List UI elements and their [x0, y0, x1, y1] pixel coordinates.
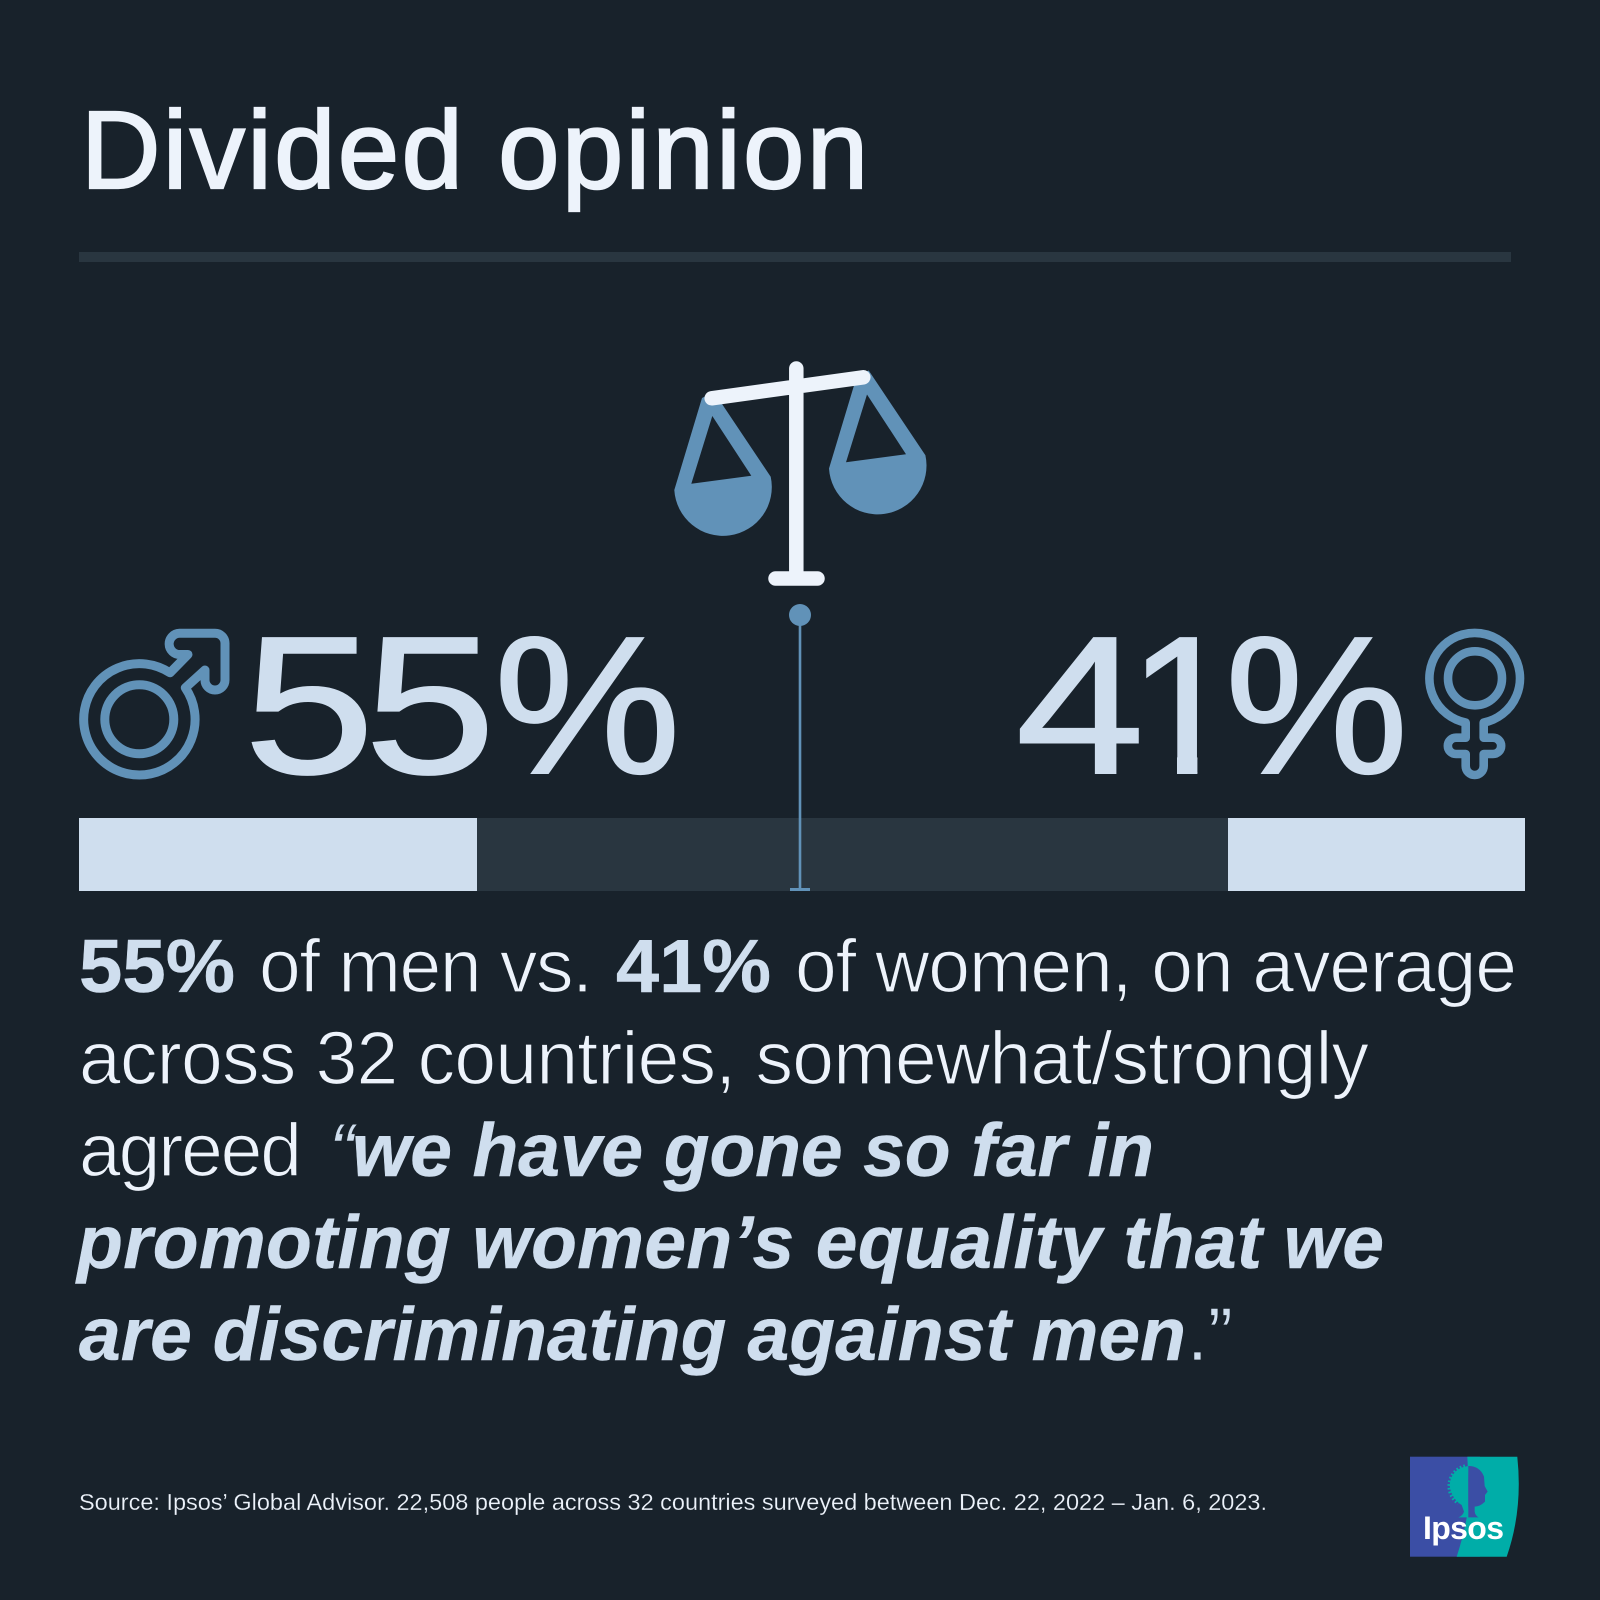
men percentage [244, 596, 681, 815]
men percentage: 5 [244, 596, 375, 815]
body statement: promoting women’s equality that we [75, 1200, 1384, 1284]
women percentage: 1 [1128, 596, 1239, 815]
women percentage: % [1225, 596, 1408, 815]
body statement: of men vs. [259, 924, 593, 1008]
body statement: “ [329, 1108, 358, 1192]
body statement: 55% [79, 924, 235, 1008]
source note: Source: Ipsos’ Global Advisor. 22,508 people across 32 countries surveyed between Dec. 22, 2022 – Jan. 6, 2023. [79, 1489, 1267, 1515]
men percentage: % [494, 596, 681, 815]
icon: female symbol [1429, 633, 1520, 775]
icon: balance scale [674, 368, 927, 578]
body statement: agreed [79, 1108, 302, 1192]
title: Divided opinion [81, 89, 868, 212]
logo: Ipsos [1410, 1457, 1519, 1557]
women percentage [1020, 636, 1402, 776]
body statement: of women, on average [795, 924, 1517, 1008]
body statement: are discriminating against men [79, 1292, 1186, 1376]
midpoint marker [789, 604, 811, 891]
men percentage: 5 [364, 596, 496, 815]
body statement: 41% [616, 924, 771, 1008]
logo: Ipsos: Ipsos [1423, 1510, 1504, 1546]
icon: male symbol [84, 633, 225, 775]
women percentage: 4 [1016, 597, 1144, 815]
body statement: we have gone so far in [352, 1108, 1154, 1192]
comparison bar [79, 818, 1525, 891]
body statement [75, 924, 1517, 1376]
body statement: .” [1187, 1292, 1233, 1376]
body statement: across 32 countries, somewhat/strongly [79, 1016, 1370, 1100]
